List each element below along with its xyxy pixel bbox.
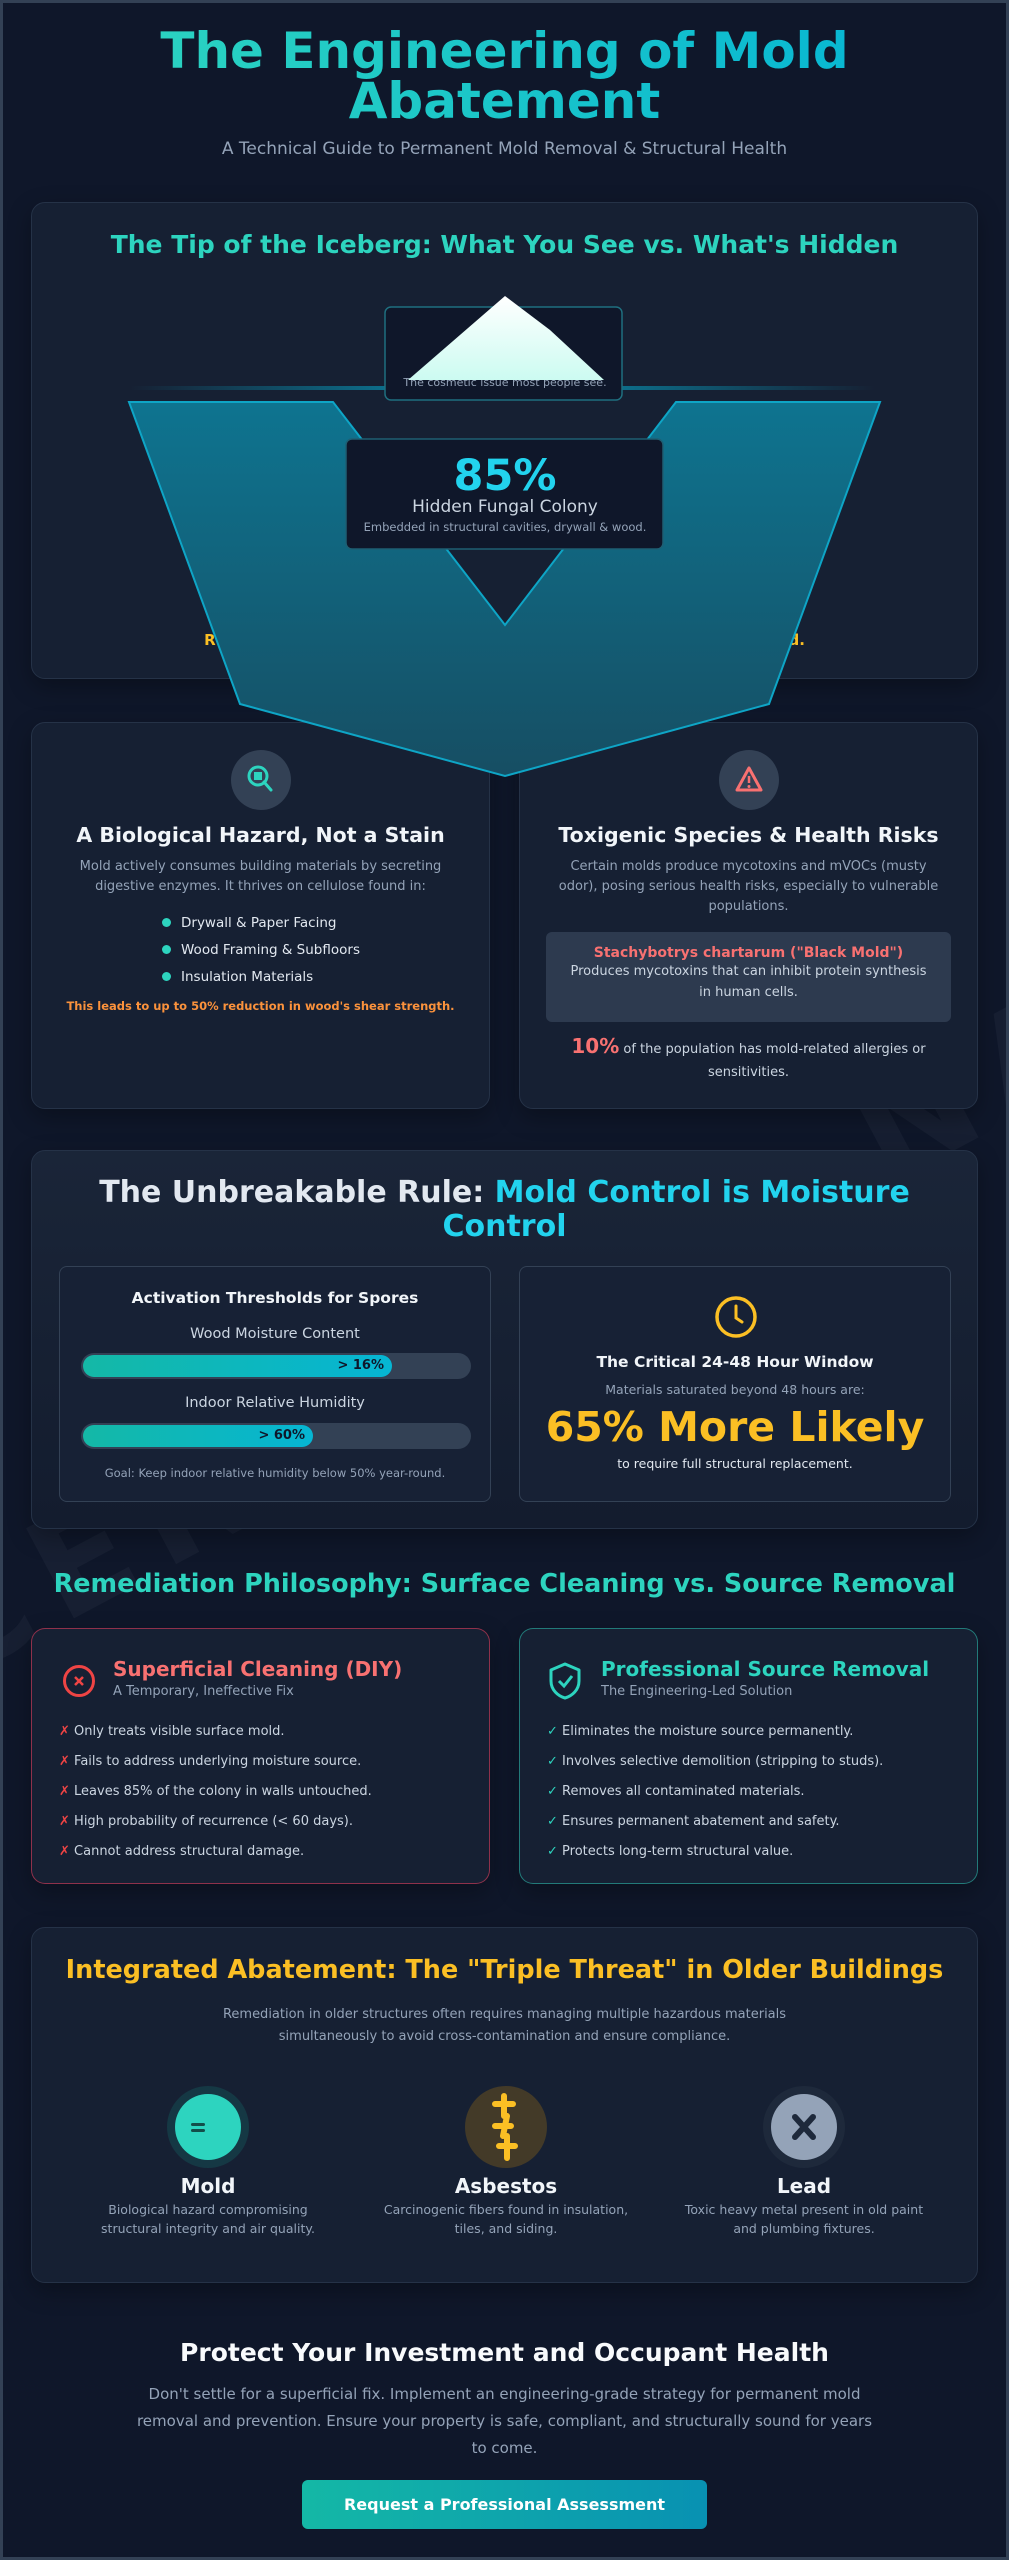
85% callout <box>346 439 663 549</box>
description <box>223 2007 786 2044</box>
text: CTA: Don't settle for a superficial fix. Implement an engineering-grade strategy for permanent mold <box>149 2385 860 2403</box>
bar: humidity: > 60% <box>258 1428 305 1443</box>
button: CTA: Request a Professional Assessment <box>344 2495 665 2514</box>
item: lead <box>684 2086 923 2236</box>
panel: triple threat: and plumbing fixtures. <box>733 2221 875 2236</box>
heading: remediation: Remediation Philosophy: Surface Cleaning vs. Source Removal <box>54 1569 955 1599</box>
list: benefits: ✓ Protects long-term structural value. <box>547 1844 793 1859</box>
panel: triple threat <box>31 1927 978 2283</box>
title <box>100 26 909 126</box>
callout: black mold <box>546 932 951 1022</box>
description <box>559 859 938 914</box>
stat: 10%: sensitivities. <box>708 1065 789 1080</box>
callout: recurrence warning: Recurring growth means the hidden colony was never fully eliminated. <box>204 631 805 649</box>
title: The Engineering of Mold <box>160 22 849 80</box>
panel: toxigenic species <box>519 722 978 1109</box>
label: humidity: Indoor Relative Humidity <box>185 1395 365 1411</box>
item: asbestos: Carcinogenic fibers found in insulation, <box>384 2202 628 2217</box>
item: mold <box>101 2086 315 2236</box>
stat: 10%: 10% of the population has mold-related allergies or <box>571 1034 926 1058</box>
stat: 10% <box>571 1034 926 1080</box>
list: materials <box>162 915 360 985</box>
title: Abatement <box>349 72 660 130</box>
panel: superficial cleaning <box>31 1628 490 1884</box>
sub-panel: 24-48 hour window <box>519 1266 951 1502</box>
icon: warning <box>719 750 779 810</box>
text: Materials saturated beyond 48 hours are: <box>605 1382 865 1397</box>
text: CTA: removal and prevention. Ensure your property is safe, compliant, and structurally sound for years <box>137 2412 872 2430</box>
description: Certain molds produce mycotoxins and mVOCs (musty <box>570 859 927 874</box>
button: CTA <box>302 2480 707 2529</box>
callout: black mold: Stachybotrys chartarum ("Black Mold") <box>594 945 903 961</box>
description: Remediation in older structures often requires managing multiple hazardous materials <box>223 2007 786 2022</box>
heading: A Biological Hazard, Not a Stain <box>76 823 445 847</box>
heading: Toxigenic Species & Health Risks <box>558 823 939 847</box>
item: asbestos <box>384 2086 628 2236</box>
stat: 65%: 65% More Likely <box>546 1403 924 1451</box>
list: drawbacks <box>59 1724 372 1859</box>
85% callout: Hidden Fungal Colony <box>412 497 598 517</box>
panel: moisture control <box>31 1150 978 1529</box>
description <box>80 859 441 894</box>
heading: iceberg: The Tip of the Iceberg: What You See vs. What's Hidden <box>111 230 898 259</box>
list: benefits: ✓ Involves selective demolition (stripping to studs). <box>547 1754 883 1769</box>
tip box: The cosmetic issue most people see. <box>402 376 607 389</box>
heading: Integrated Abatement: The "Triple Threat" in Older Buildings <box>66 1955 943 1985</box>
icon: magnifier <box>231 750 291 810</box>
bar: wood moisture: > 16% <box>337 1358 384 1373</box>
heading: window: The Critical 24-48 Hour Window <box>596 1353 874 1371</box>
item: lead: Toxic heavy metal present in old paint <box>685 2202 923 2217</box>
bar: wood moisture <box>81 1353 471 1379</box>
list: drawbacks: ✗ Cannot address structural damage. <box>59 1844 304 1859</box>
item: mold: Mold <box>181 2174 235 2198</box>
list: drawbacks: ✗ High probability of recurrence (< 60 days). <box>59 1814 353 1829</box>
subtitle: The Engineering-Led Solution <box>601 1684 792 1699</box>
title: Superficial Cleaning (DIY) <box>113 1657 402 1681</box>
callout: strength loss: This leads to up to 50% reduction in wood's shear strength. <box>66 999 455 1013</box>
callout: black mold: in human cells. <box>699 985 798 1000</box>
list: materials: Insulation Materials <box>181 969 313 985</box>
heading: thresholds: Activation Thresholds for Spores <box>132 1289 418 1307</box>
panel: iceberg <box>31 202 978 679</box>
text: to require full structural replacement. <box>617 1456 853 1471</box>
sub-panel: thresholds <box>59 1266 491 1502</box>
list: benefits: ✓ Ensures permanent abatement and safety. <box>547 1814 840 1829</box>
panel: biological hazard <box>31 722 490 1109</box>
text: CTA <box>137 2385 872 2457</box>
text: CTA: to come. <box>472 2439 537 2457</box>
heading: CTA: Protect Your Investment and Occupant Health <box>180 2338 829 2367</box>
list: benefits: ✓ Removes all contaminated materials. <box>547 1784 805 1799</box>
panel: triple threat: tiles, and siding. <box>455 2221 557 2236</box>
tip box <box>385 307 622 400</box>
heading: The Unbreakable Rule: Mold Control is Moisture <box>99 1175 910 1210</box>
submerged mass <box>129 402 880 776</box>
panel: triple threat: structural integrity and air quality. <box>101 2221 315 2236</box>
list: benefits: ✓ Eliminates the moisture source permanently. <box>547 1724 853 1739</box>
description: digestive enzymes. It thrives on cellulose found in: <box>95 879 426 894</box>
icon: x circle <box>63 1665 95 1697</box>
description: odor), posing serious health risks, especially to vulnerable <box>559 879 938 894</box>
icon: mold <box>167 2086 249 2168</box>
callout: black mold: Produces mycotoxins that can inhibit protein synthesis <box>570 964 927 979</box>
label: wood moisture: Wood Moisture Content <box>190 1326 360 1342</box>
icon: lead <box>763 2086 845 2168</box>
heading: Control <box>442 1209 566 1244</box>
note: goal: Goal: Keep indoor relative humidity below 50% year-round. <box>105 1466 445 1480</box>
title: Professional Source Removal <box>601 1657 929 1681</box>
description: populations. <box>708 899 789 914</box>
item: lead: Lead <box>777 2174 831 2198</box>
list: materials: Drywall & Paper Facing <box>181 915 336 931</box>
panel: professional removal <box>519 1628 978 1884</box>
item: mold: Biological hazard compromising <box>108 2202 308 2217</box>
item: asbestos: Asbestos <box>455 2174 557 2198</box>
iceberg tip <box>408 296 604 380</box>
description: Mold actively consumes building materials by secreting <box>80 859 441 874</box>
waterline <box>130 386 875 390</box>
list: benefits <box>547 1724 883 1859</box>
subtitle: A Technical Guide to Permanent Mold Removal & Structural Health <box>222 139 787 159</box>
list: drawbacks: ✗ Only treats visible surface mold. <box>59 1724 285 1739</box>
subtitle: A Temporary, Ineffective Fix <box>113 1684 294 1699</box>
list: materials: Wood Framing & Subfloors <box>181 942 360 958</box>
description: simultaneously to avoid cross-contamination and ensure compliance. <box>279 2029 730 2044</box>
list: drawbacks: ✗ Fails to address underlying moisture source. <box>59 1754 361 1769</box>
85% callout: 85% <box>454 451 556 501</box>
heading <box>99 1175 910 1244</box>
iceberg diagram <box>128 296 882 777</box>
icon: asbestos <box>465 2086 547 2168</box>
85% callout: Embedded in structural cavities, drywall & wood. <box>364 520 646 534</box>
bar: humidity <box>81 1423 471 1449</box>
icon: clock <box>715 1296 757 1338</box>
icon: shield check <box>550 1662 580 1700</box>
list: drawbacks: ✗ Leaves 85% of the colony in walls untouched. <box>59 1784 372 1799</box>
